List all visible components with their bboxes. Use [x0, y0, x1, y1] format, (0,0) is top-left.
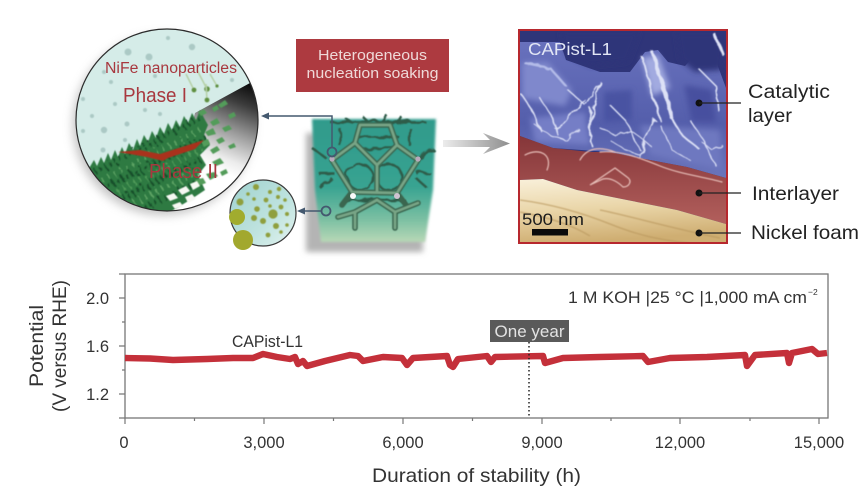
y tick labels: 1.6	[86, 338, 109, 356]
catalytic layer ridges	[522, 35, 724, 165]
plot frame	[125, 274, 828, 418]
panel: Phase I and Phase II magnified circle	[70, 25, 265, 215]
dark and light facets	[520, 42, 722, 166]
nanosheet texture	[95, 118, 206, 210]
label: Catalytic layer	[696, 82, 830, 127]
label: Interlayer	[696, 184, 840, 205]
x tick labels: 0	[119, 434, 129, 452]
x axis title: Duration of stability (h)	[372, 465, 581, 487]
series label: CAPist-L1	[232, 333, 303, 351]
y axis title	[27, 280, 71, 412]
label: CAPist-L1: CAPist-L1	[528, 39, 612, 59]
large olive balls	[229, 209, 245, 225]
y axis title: Potential	[27, 305, 48, 387]
teal block	[312, 119, 436, 242]
x tick labels: 3,000	[243, 434, 285, 452]
SEM frame	[519, 30, 727, 243]
label: Nickel foam	[696, 222, 859, 244]
panel: SEM cross-section	[519, 30, 727, 243]
catalytic layer	[520, 42, 726, 178]
scale label: 500 nm	[522, 211, 584, 229]
circle interior	[76, 30, 258, 210]
x tick labels	[119, 434, 844, 452]
y tick labels: 2.0	[86, 290, 109, 308]
callout: Heterogeneous nucleation soaking: Heterogeneous	[318, 47, 427, 64]
interlayer highlights	[525, 149, 722, 187]
label: Interlayer: Interlayer	[752, 184, 840, 205]
highlight nodes	[350, 193, 356, 199]
label: Catalytic layer: Catalytic	[748, 82, 830, 103]
x tick labels: 12,000	[655, 434, 705, 452]
label: NiFe nanoparticles: NiFe nanoparticles	[105, 60, 237, 77]
arrow: grey process arrow	[443, 133, 510, 154]
one year marker line	[528, 342, 530, 417]
panel: teal block with porous framework	[306, 116, 436, 252]
green nanosheet field	[88, 110, 210, 215]
dark substrate gradient	[173, 83, 258, 210]
axis ticks	[119, 274, 819, 424]
y tick labels: 1.2	[86, 386, 109, 404]
nickel foam streaks	[520, 200, 720, 243]
dark framework detail	[312, 116, 433, 200]
callout: Heterogeneous nucleation soaking: nucleation soaking	[306, 65, 438, 82]
line chart: stability	[27, 274, 844, 487]
data series: CAPist-L1	[125, 349, 827, 367]
falling green particles	[186, 70, 219, 102]
conditions superscript: −2	[808, 287, 818, 297]
conditions text: 1 M KOH |25 °C |1,000 mA cm	[568, 289, 807, 307]
scale bar	[532, 229, 568, 236]
label: Nickel foam: Nickel foam	[751, 222, 859, 244]
arrow: framework to large circle	[261, 112, 336, 156]
label: Catalytic layer: layer	[748, 106, 793, 127]
framework strut outlines	[332, 125, 418, 228]
circle shadow	[73, 35, 253, 215]
x tick labels: 6,000	[382, 434, 424, 452]
y axis title: (V versus RHE)	[50, 280, 71, 412]
arrow: framework to small circle	[297, 206, 330, 216]
block shadow	[306, 133, 423, 252]
panel: small nanoparticle circle	[229, 180, 296, 250]
green flakes	[195, 100, 236, 186]
Phase boundary red layer	[118, 140, 204, 161]
label: Phase II: Phase II	[149, 161, 218, 183]
label: Phase I: Phase I	[123, 85, 187, 107]
SEM image	[520, 31, 726, 243]
white gaps in field	[166, 181, 200, 209]
small olive particles	[236, 184, 289, 237]
x tick labels: 15,000	[794, 434, 844, 452]
interlayer	[520, 136, 726, 224]
framework struts	[332, 125, 418, 228]
nanoparticle dots	[81, 36, 234, 152]
x tick labels: 9,000	[521, 434, 563, 452]
small circle body	[230, 180, 296, 246]
circle border	[76, 29, 258, 211]
y tick labels	[86, 290, 109, 404]
callout: Heterogeneous nucleation soaking	[296, 39, 449, 92]
one year tag: One year	[494, 323, 565, 341]
nickel foam	[520, 179, 726, 243]
